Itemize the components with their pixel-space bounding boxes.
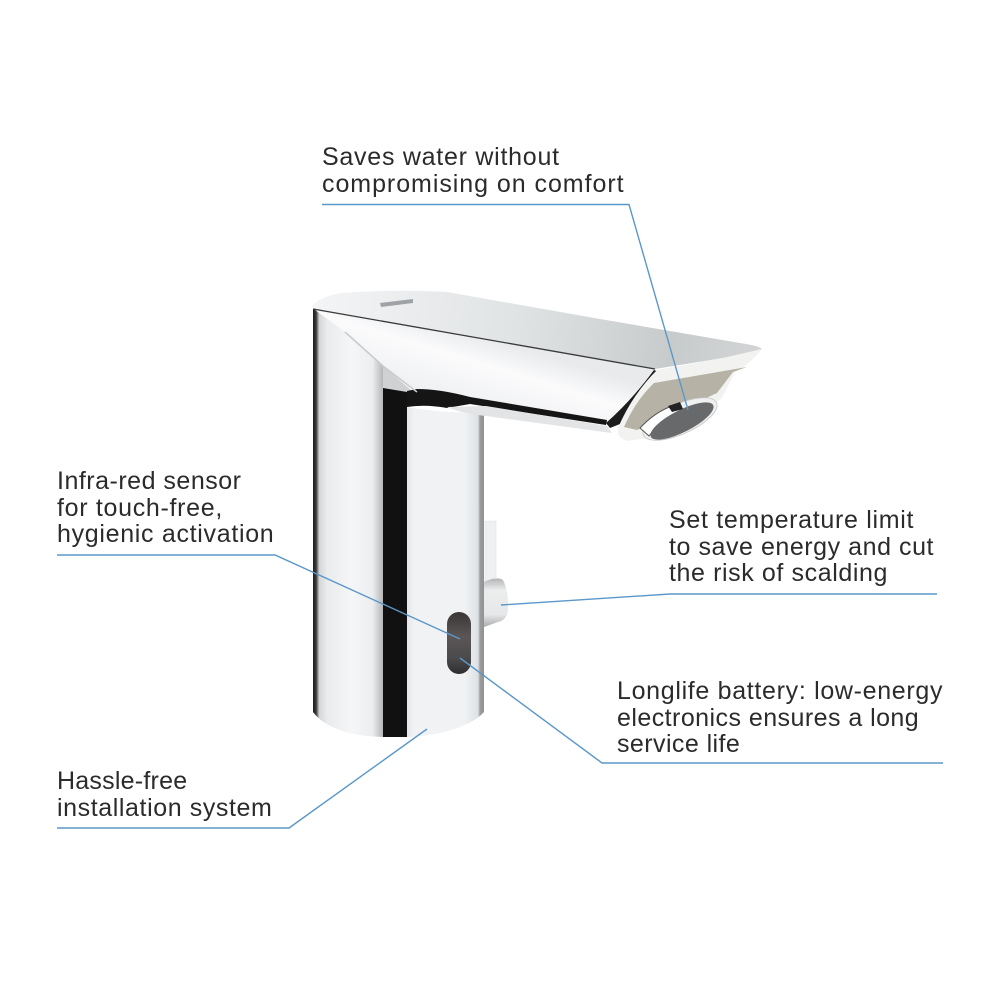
leader: saves water [322, 204, 688, 410]
text: longlife battery: Longlife battery: low-energy [617, 677, 943, 705]
aerator [637, 389, 723, 449]
nozzle housing [618, 349, 762, 441]
leader: installation [57, 729, 427, 828]
infra-red sensor window [447, 612, 471, 674]
faucet body [313, 309, 484, 737]
leader lines [57, 204, 943, 828]
faucet [312, 291, 762, 737]
text: infra-red sensor: Infra-red sensor [57, 467, 241, 495]
temperature knob [484, 578, 508, 627]
text: saves water [322, 143, 625, 198]
text: temperature limit: to save energy and cut [669, 532, 934, 560]
text: saves water: Saves water without [322, 143, 560, 171]
text: temperature limit: the risk of scalding [669, 559, 888, 587]
text: infra-red sensor: hygienic activation [57, 520, 274, 548]
text: installation: installation system [57, 794, 272, 822]
leader: longlife battery [460, 658, 943, 763]
spout [315, 310, 659, 433]
text: longlife battery: electronics ensures a long [617, 704, 919, 732]
text: infra-red sensor: for touch-free, [57, 494, 223, 522]
top plate [312, 291, 762, 369]
text: infra-red sensor [57, 467, 274, 548]
logo mark [380, 299, 413, 307]
leader: infra-red sensor [57, 555, 460, 639]
text: temperature limit [669, 506, 934, 587]
text: saves water: compromising on comfort [322, 170, 625, 198]
text: temperature limit: Set temperature limit [669, 506, 914, 534]
lever [485, 521, 496, 582]
text: longlife battery [617, 677, 943, 758]
text: installation: Hassle-free [57, 767, 187, 795]
text: longlife battery: service life [617, 730, 740, 758]
leader: temperature limit [501, 594, 937, 605]
text: installation [57, 767, 272, 822]
